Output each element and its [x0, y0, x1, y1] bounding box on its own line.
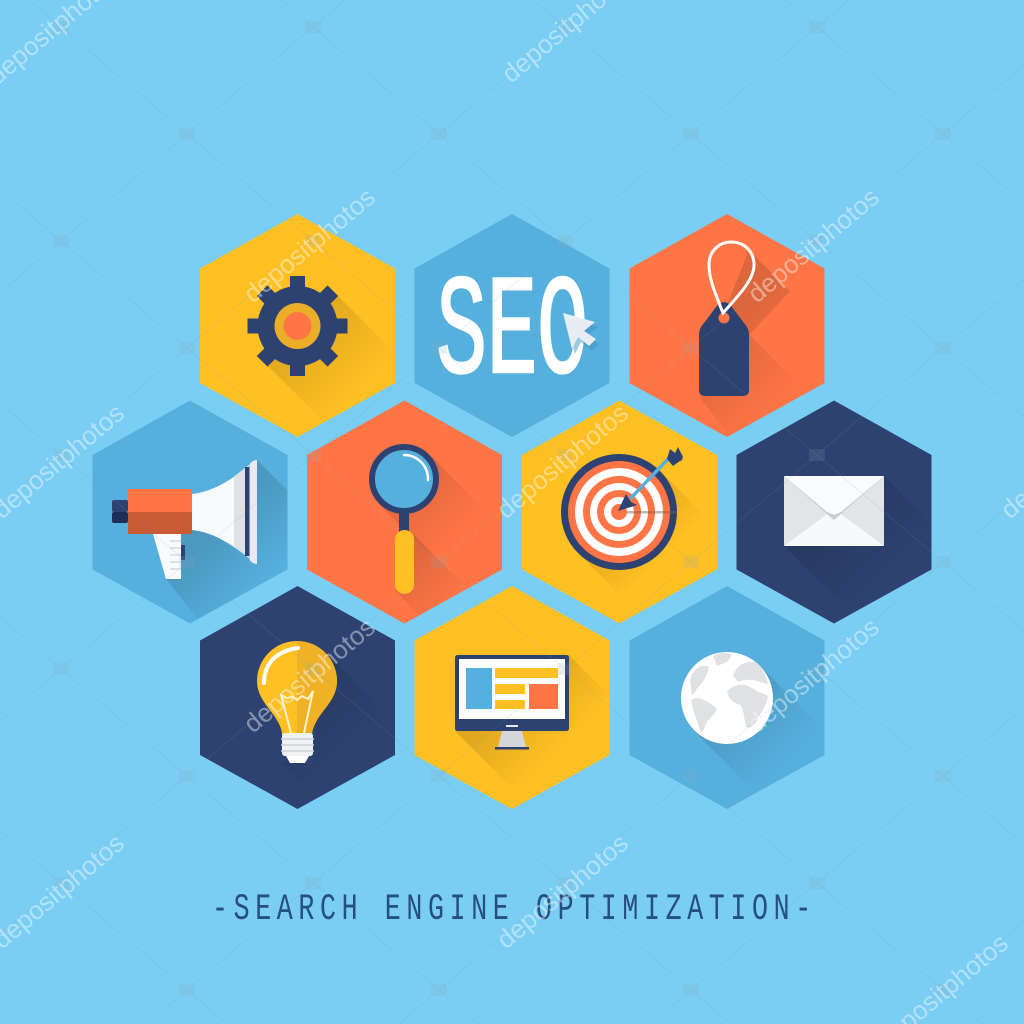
- icon: megaphone: [112, 460, 257, 579]
- icon: price tag: [699, 242, 754, 396]
- icon: light bulb: [257, 641, 337, 763]
- panel: megaphone hexagon: [92, 400, 288, 624]
- panel: magnifier hexagon: [307, 400, 502, 624]
- watermark text: depositphotos: [238, 182, 381, 309]
- icon: desktop monitor: [455, 655, 569, 750]
- icon: gear: [248, 276, 348, 376]
- panel: monitor hexagon: [414, 586, 622, 809]
- watermark text: depositphotos: [491, 398, 634, 525]
- icon: envelope: [784, 476, 884, 546]
- title: search engine optimization: -SEARCH ENGINE OPTIMIZATION-: [212, 888, 817, 930]
- panel: price tag hexagon: [630, 214, 824, 437]
- icon: target with arrow: [561, 447, 684, 570]
- heading: SEO: SEO: [436, 256, 588, 416]
- panel: settings gear hexagon: [200, 214, 397, 437]
- panel: globe hexagon: [630, 586, 825, 809]
- panel: envelope hexagon: [736, 400, 945, 624]
- icon: globe: [681, 652, 773, 744]
- watermark text: depositphotos: [238, 612, 381, 739]
- watermark text: depositphotos: [742, 612, 885, 739]
- watermark text: depositphotos: [491, 828, 634, 955]
- panel: SEO hexagon: [414, 214, 610, 437]
- icon: cursor arrow: [563, 313, 599, 354]
- panel: light bulb hexagon: [200, 586, 395, 809]
- icon: magnifying glass: [372, 447, 436, 594]
- watermark text: depositphotos: [742, 182, 885, 309]
- panel: target hexagon: [522, 400, 717, 624]
